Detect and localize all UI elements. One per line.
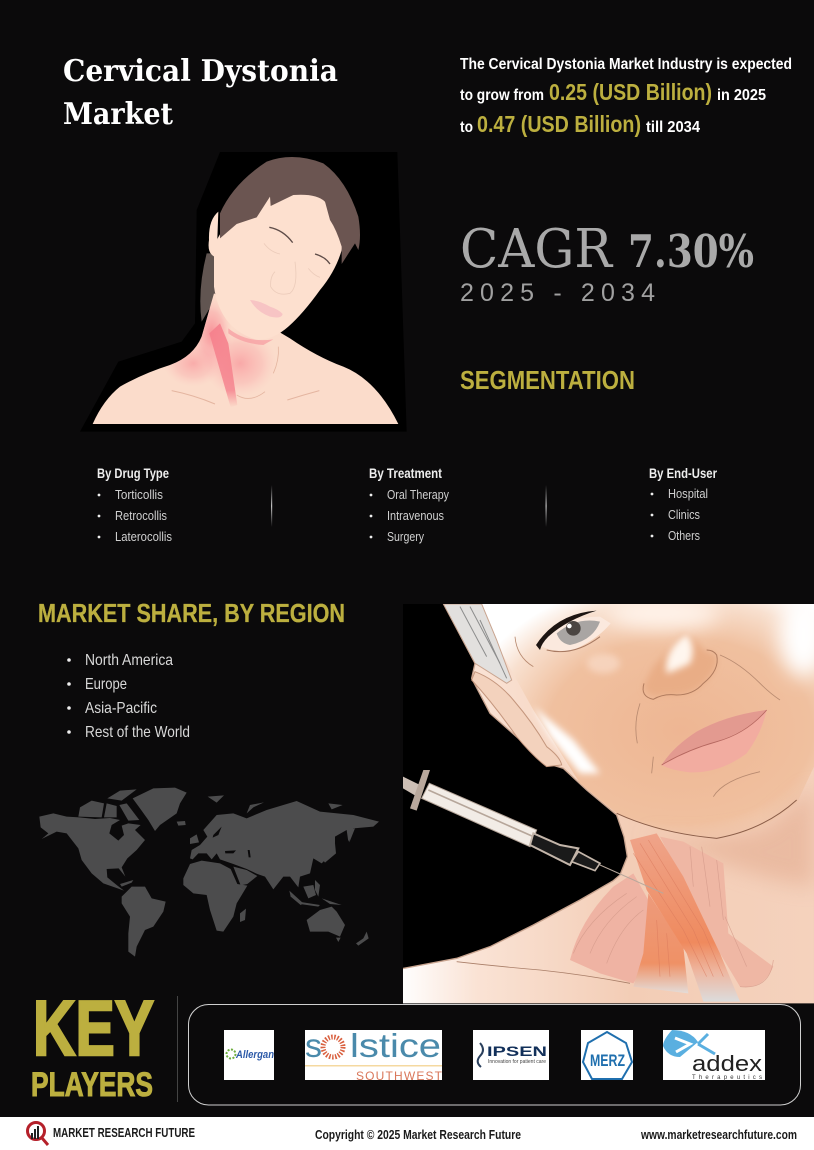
logo: Allergan: [224, 1030, 274, 1080]
forecast statement: in 2025: [717, 87, 766, 104]
segment column: end-user: Clinics: [668, 507, 700, 522]
grey hair: [443, 604, 512, 683]
region list: Europe: [85, 676, 127, 693]
logo: Ipsen: [473, 1030, 549, 1080]
segment column: end-user: Hospital: [668, 486, 708, 501]
logo: Merz: [581, 1030, 633, 1080]
world map: [39, 788, 379, 957]
logo: Allergan: Allergan: [235, 1049, 274, 1061]
footer bar: [0, 1117, 814, 1150]
skin and shoulders: [400, 600, 814, 1010]
segment column: treatment: Oral Therapy: [387, 487, 449, 502]
ear: [472, 672, 562, 767]
title: Market: [63, 97, 173, 132]
forecast statement: 0.47 (USD Billion): [477, 111, 641, 137]
key players panel: [188, 1004, 800, 1105]
footer logo icon: [28, 1122, 48, 1145]
forecast statement: [460, 56, 792, 137]
segment column: drug type: [97, 465, 172, 544]
forecast statement: till 2034: [646, 119, 700, 136]
lips: [250, 300, 283, 318]
CAGR: CAGR: [460, 219, 614, 280]
segment column: drug type: Torticollis: [115, 487, 163, 502]
nose: [643, 633, 717, 696]
black cut-out behind figure: [80, 152, 407, 432]
heading: key players: KEY: [33, 984, 154, 1072]
segment column: drug type: Retrocollis: [115, 508, 167, 523]
segment column: end-user: By End-User: [649, 465, 717, 481]
region list: [67, 652, 190, 741]
logo: Merz: MERZ: [590, 1051, 625, 1070]
logo: Solstice Southwest: lstice: [350, 1027, 441, 1064]
segment column: drug type: Laterocollis: [115, 529, 172, 544]
segment column: drug type: By Drug Type: [97, 465, 169, 481]
logo: Solstice Southwest: SOUTHWEST: [356, 1069, 443, 1083]
hair: [220, 157, 360, 264]
CAGR: 7.30%: [628, 225, 754, 278]
region list: North America: [85, 652, 173, 669]
forecast statement: to grow from: [460, 87, 544, 104]
forecast statement: 0.25 (USD Billion): [549, 79, 712, 105]
logo: Solstice Southwest: s: [305, 1027, 322, 1064]
region list: Asia-Pacific: [85, 700, 157, 717]
illustration: woman with tilted neck: [80, 152, 407, 432]
eye: [537, 617, 611, 651]
heading: key players: [31, 984, 154, 1104]
forecast statement: to: [460, 119, 473, 136]
ear: [209, 212, 218, 257]
footer bar: Copyright © 2025 Market Research Future: [315, 1127, 521, 1142]
segment column: treatment: Surgery: [387, 529, 424, 544]
face shading: [480, 604, 814, 838]
body: [93, 293, 398, 424]
segment column: end-user: [649, 465, 717, 543]
neck redness: [169, 302, 269, 406]
segment column: treatment: [369, 465, 449, 544]
segment column: treatment: Intravenous: [387, 508, 444, 523]
illustration: neck injection: [400, 597, 814, 1010]
logo: Addex: [663, 1030, 765, 1081]
jaw redness: [228, 328, 273, 345]
logo: Ipsen: Innovation for patient care: [488, 1059, 546, 1065]
face: [214, 187, 343, 340]
CAGR: 2025 - 2034: [460, 279, 655, 307]
jaw edge: [617, 800, 797, 838]
region list: Rest of the World: [85, 724, 190, 741]
footer bar: MARKET RESEARCH FUTURE: [53, 1125, 195, 1140]
heading: market share: MARKET SHARE, BY REGION: [38, 598, 345, 628]
heading: key players: PLAYERS: [31, 1066, 153, 1104]
logo: Addex: addex: [692, 1051, 762, 1076]
segment column: treatment: By Treatment: [369, 465, 442, 481]
title: [63, 54, 338, 132]
logo: Addex: Therapeutics: [692, 1075, 762, 1081]
syringe: [403, 770, 663, 893]
lips: [662, 710, 767, 772]
heading: segmentation: SEGMENTATION: [460, 365, 635, 395]
neck muscle: [209, 323, 237, 407]
CAGR: [460, 219, 754, 307]
logo: Ipsen: IPSEN: [487, 1043, 547, 1059]
wrinkle lines: [515, 637, 780, 797]
neck muscles: [570, 873, 653, 983]
facial lines: [172, 227, 330, 404]
logo: Solstice Southwest: [305, 1027, 443, 1083]
back hair: [200, 253, 217, 322]
title: Cervical Dystonia: [63, 54, 338, 89]
segment column: end-user: Others: [668, 528, 700, 543]
